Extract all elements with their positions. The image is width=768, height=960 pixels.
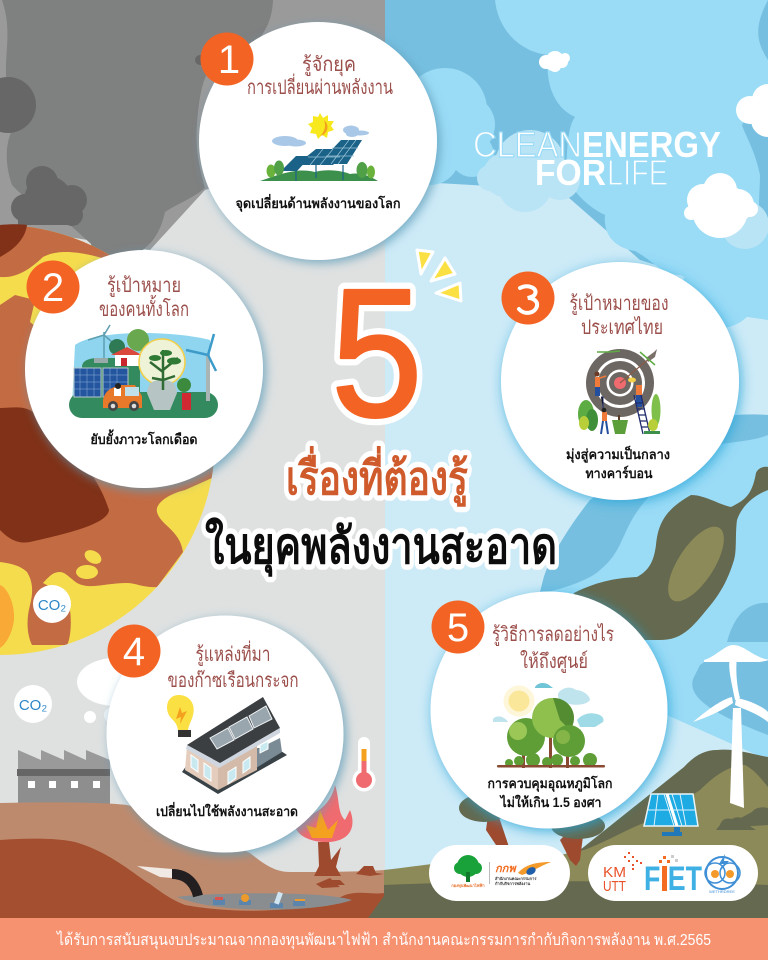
CO2 badge near factory — [14, 685, 52, 723]
caption 4: เปลี่ยนไปใช้พลังงานสะอาด — [156, 801, 298, 819]
badge 5 — [432, 600, 484, 654]
brand title: Clean Energy For Life — [473, 124, 721, 193]
heading 1 — [247, 54, 393, 99]
badge 4: 4 — [123, 630, 145, 674]
trees on the hill — [459, 794, 605, 866]
panel 2: global goal — [25, 250, 263, 488]
caption 5 — [488, 774, 612, 810]
badge 5: 5 — [447, 606, 469, 650]
hills on the right — [384, 750, 768, 918]
badge 2: 2 — [42, 266, 64, 310]
panel 3: Thailand's goal — [501, 262, 739, 500]
heading 3: รู้เป้าหมายของ — [570, 293, 668, 316]
smoke cloud — [0, 0, 273, 260]
icon: solar house with bulb — [167, 695, 287, 794]
badge 1 — [200, 32, 254, 86]
planet — [0, 223, 230, 655]
brand title: Clean Energy For Life: ENERGY — [582, 124, 721, 165]
icon: trees and sun — [493, 683, 605, 768]
footer band — [0, 918, 768, 960]
heading 2 — [99, 275, 189, 321]
panel 5: reach net zero — [430, 592, 668, 828]
caption 5: การควบคุมอุณหภูมิโลก — [488, 774, 612, 792]
logo pill: KMUTT FIET — [588, 845, 758, 901]
CO2 badge on planet: CO₂ — [38, 597, 66, 614]
logo pill: KMUTT FIET: UTT — [603, 878, 626, 895]
icon: clean world — [69, 325, 218, 418]
CO2 badge near factory: CO₂ — [19, 697, 47, 714]
main heading line 2: ในยุคพลังงานสะอาด — [205, 517, 557, 577]
caption 3: ทางคาร์บอน — [586, 465, 653, 481]
heading 1: รู้จักยุค — [302, 54, 356, 77]
panel 1: energy transition — [199, 22, 437, 260]
logo pill: funders: กองทุนพัฒนาไฟฟ้า — [451, 882, 485, 889]
icon: target — [578, 349, 660, 434]
badge 3 — [502, 272, 554, 324]
lower sky waves — [538, 414, 768, 760]
heading 1: การเปลี่ยนผ่านพลังงาน — [247, 73, 393, 99]
logo pill: funders: กำกับกิจการพลังงาน — [495, 881, 530, 886]
heading 2: ของคนทั้งโลก — [99, 295, 189, 321]
big number 5: 5 — [331, 250, 423, 455]
caption 1: จุดเปลี่ยนด้านพลังงานของโลก — [236, 193, 400, 212]
big number 5: 5 — [331, 250, 423, 455]
logo pill: funders: สำนักงานคณะกรรมการ — [495, 876, 537, 881]
caption 2: ยับยั้งภาวะโลกเดือด — [90, 429, 198, 447]
factory smoke puffs — [77, 658, 153, 723]
caption 5: ไม่ให้เกิน 1.5 องศา — [499, 794, 602, 810]
heading 5 — [492, 623, 614, 674]
solar panel — [644, 794, 698, 836]
main heading line 1: เรื่องที่ต้องรู้ — [286, 446, 468, 507]
heading 2: รู้เป้าหมาย — [107, 275, 181, 298]
logo pill: KMUTT FIET: WETHRDREE — [709, 889, 735, 894]
heading 5: ให้ถึงศูนย์ — [520, 650, 588, 674]
heading 3: ประเทศไทย — [581, 316, 663, 339]
waste pipe — [137, 866, 198, 896]
brand title: Clean Energy For Life: CLEAN — [473, 124, 582, 165]
logo pill: funders — [429, 845, 570, 901]
burning tree — [295, 785, 384, 888]
logo pill: KMUTT FIET: FIET — [644, 860, 702, 898]
thermometer — [352, 737, 376, 792]
caption 3 — [566, 445, 670, 481]
floating waste — [213, 892, 305, 908]
CO2 badge on planet — [33, 585, 71, 623]
brand title: Clean Energy For Life: FOR — [535, 152, 606, 193]
heading 4 — [168, 640, 298, 692]
background: polluted left half — [0, 0, 385, 960]
heading 5: รู้วิธีการลดอย่างไร — [492, 623, 614, 647]
badge 2 — [26, 260, 80, 314]
wind turbine — [693, 645, 768, 808]
polluted ground — [0, 802, 384, 918]
heading 3 — [570, 293, 668, 339]
background: clean right half — [385, 0, 768, 960]
icon: solar farm — [260, 113, 378, 181]
heading 4: ของก๊าซเรือนกระจก — [168, 670, 298, 692]
logo pill: KMUTT FIET: KM — [603, 864, 626, 881]
badge 4 — [108, 624, 160, 678]
spark accents — [417, 250, 461, 301]
factory — [17, 750, 110, 804]
logo pill: funders: กกพ — [495, 863, 517, 875]
heading 4: รู้แหล่งที่มา — [196, 640, 270, 667]
caption 3: มุ่งสู่ความเป็นกลาง — [566, 445, 670, 463]
brand title: Clean Energy For Life: LIFE — [607, 152, 668, 193]
badge 1: 1 — [218, 38, 240, 82]
white clouds on the right — [539, 51, 768, 238]
island — [560, 467, 768, 640]
panel 4: greenhouse gas sources — [106, 616, 344, 852]
